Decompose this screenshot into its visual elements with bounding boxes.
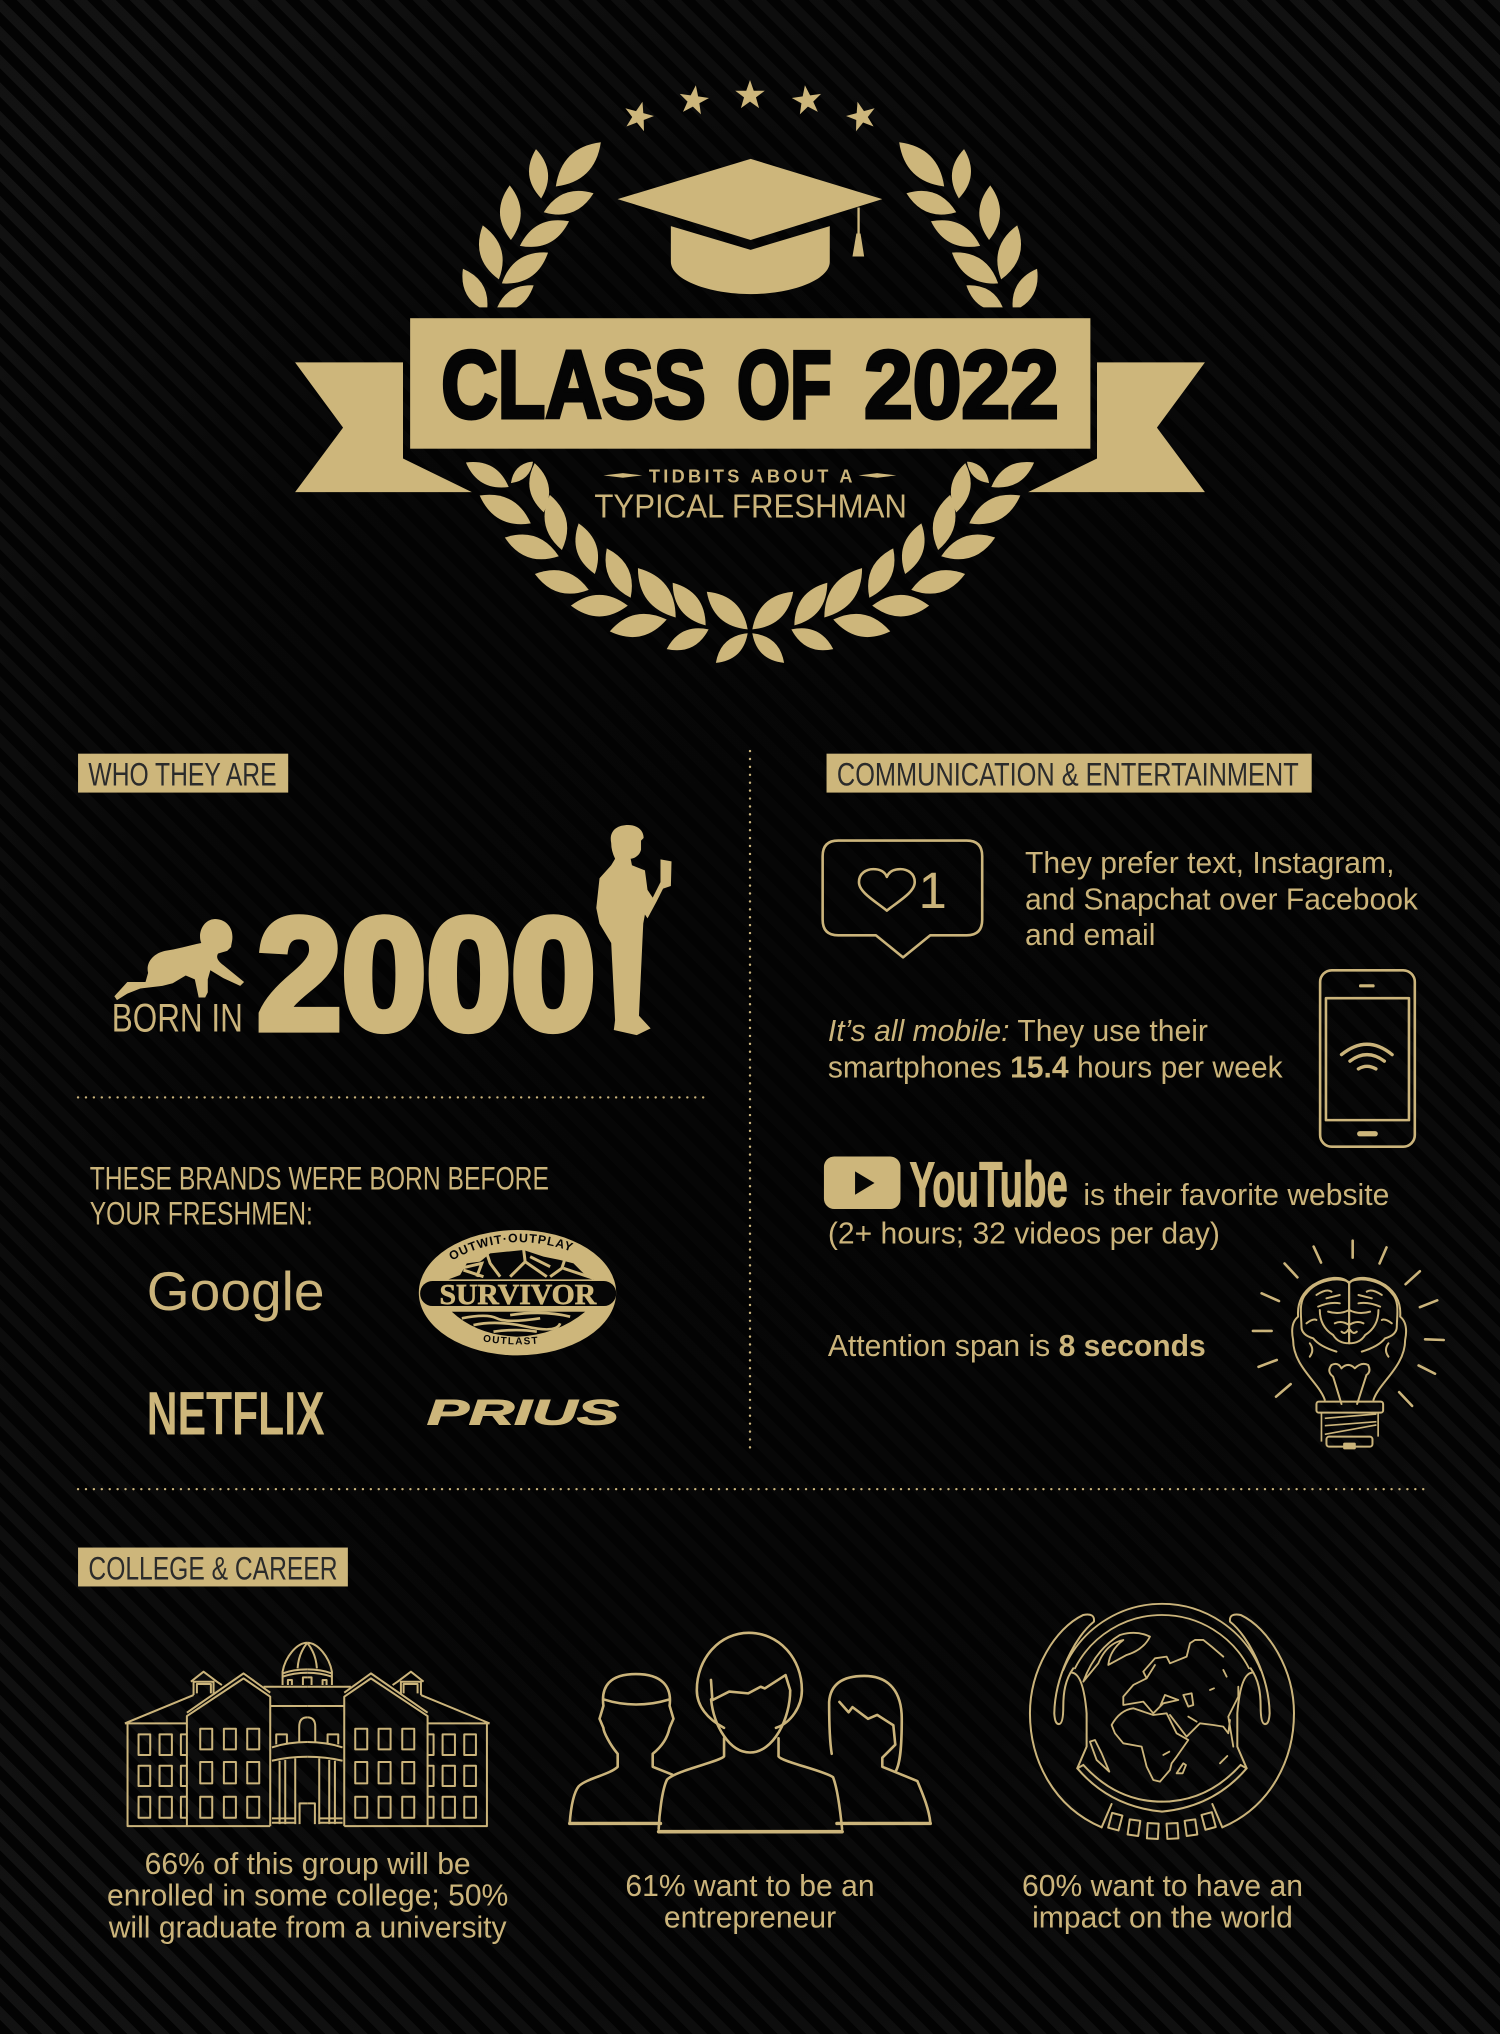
- text: brands intro: THESE BRANDS WERE BORN BEFORE: [90, 1161, 549, 1197]
- text: college stat: enrolled in some college; 50%: [107, 1880, 508, 1913]
- text: brands intro: [90, 1161, 549, 1232]
- text: college stat: will graduate from a university: [108, 1911, 507, 1944]
- text: mobile usage: [828, 1015, 1284, 1084]
- text: brands intro: YOUR FRESHMEN:: [90, 1196, 313, 1232]
- text: mobile usage: smartphones 15.4 hours per week: [828, 1051, 1284, 1084]
- subtitle: TYPICAL FRESHMAN: [594, 489, 907, 526]
- logo: prius: PRIUS: [427, 1393, 619, 1432]
- panel: communication and entertainment: [823, 754, 1444, 1449]
- title banner: 2022: [864, 331, 1059, 438]
- ribbon tails: [295, 362, 1205, 492]
- icon: college building: [125, 1643, 490, 1826]
- stars: [621, 80, 879, 133]
- text: entrepreneur stat: [625, 1870, 875, 1935]
- heading: who they are: WHO THEY ARE: [88, 756, 277, 792]
- text: favorite website: [828, 1179, 1389, 1250]
- text: entrepreneur stat: 61% want to be an: [625, 1870, 875, 1903]
- text: mobile usage: It’s all mobile: They use their: [828, 1015, 1208, 1048]
- panel: college and career: [78, 1548, 1303, 1944]
- icon: brain light bulb: [1253, 1241, 1444, 1449]
- text: favorite website: is their favorite website: [1083, 1179, 1389, 1212]
- logo: survivor: SURVIVOR: [439, 1280, 597, 1311]
- heading: college and career: COLLEGE & CAREER: [88, 1550, 337, 1586]
- text: entrepreneur stat: entrepreneur: [664, 1902, 836, 1935]
- title banner: [410, 318, 1090, 449]
- title banner: CLASS: [441, 331, 706, 438]
- icon: crawling baby: [114, 919, 244, 1000]
- text: attention span: Attention span is 8 seconds: [828, 1330, 1206, 1363]
- text: impact stat: 60% want to have an: [1022, 1870, 1303, 1903]
- logo: netflix: NETFLIX: [147, 1380, 325, 1448]
- logo: youtube: [824, 1149, 1068, 1220]
- text: preferences: [1025, 847, 1419, 952]
- panel: who they are: [78, 754, 672, 1448]
- icon: smartphone with wifi: [1320, 970, 1415, 1147]
- logo: survivor: OUTWIT·OUTPLAY: [450, 1234, 574, 1260]
- text: favorite website: (2+ hours; 32 videos per day): [828, 1217, 1220, 1250]
- text: born in: BORN IN: [112, 995, 243, 1040]
- header emblem: [295, 80, 1205, 669]
- icon: graduation cap: [618, 159, 882, 294]
- logo: survivor: [418, 1230, 616, 1356]
- laurel wreath: [455, 134, 1045, 669]
- big year 2000: 2000: [257, 886, 596, 1063]
- text: college stat: [107, 1848, 508, 1944]
- text: impact stat: impact on the world: [1032, 1902, 1293, 1935]
- icon: like notification: 1: [919, 862, 947, 919]
- icon: three people: [570, 1633, 930, 1832]
- logo: survivor: OUTLAST: [484, 1335, 538, 1344]
- text: preferences: They prefer text, Instagram,: [1025, 847, 1394, 880]
- text: college stat: 66% of this group will be: [145, 1848, 471, 1881]
- heading: communication and entertainment: COMMUNICATION & ENTERTAINMENT: [837, 756, 1299, 792]
- logo: google: Google: [147, 1261, 325, 1322]
- icon: person with phone: [596, 825, 672, 1035]
- subtitle: TIDBITS ABOUT A: [649, 467, 852, 487]
- title banner: OF: [737, 331, 832, 438]
- icon: like notification: [823, 841, 982, 957]
- logo: youtube: YouTube: [910, 1149, 1068, 1220]
- text: preferences: and email: [1025, 919, 1155, 952]
- subtitle: [594, 467, 907, 526]
- text: impact stat: [1022, 1870, 1303, 1935]
- icon: globe held in hands: [1030, 1604, 1294, 1839]
- text: preferences: and Snapchat over Facebook: [1025, 883, 1419, 916]
